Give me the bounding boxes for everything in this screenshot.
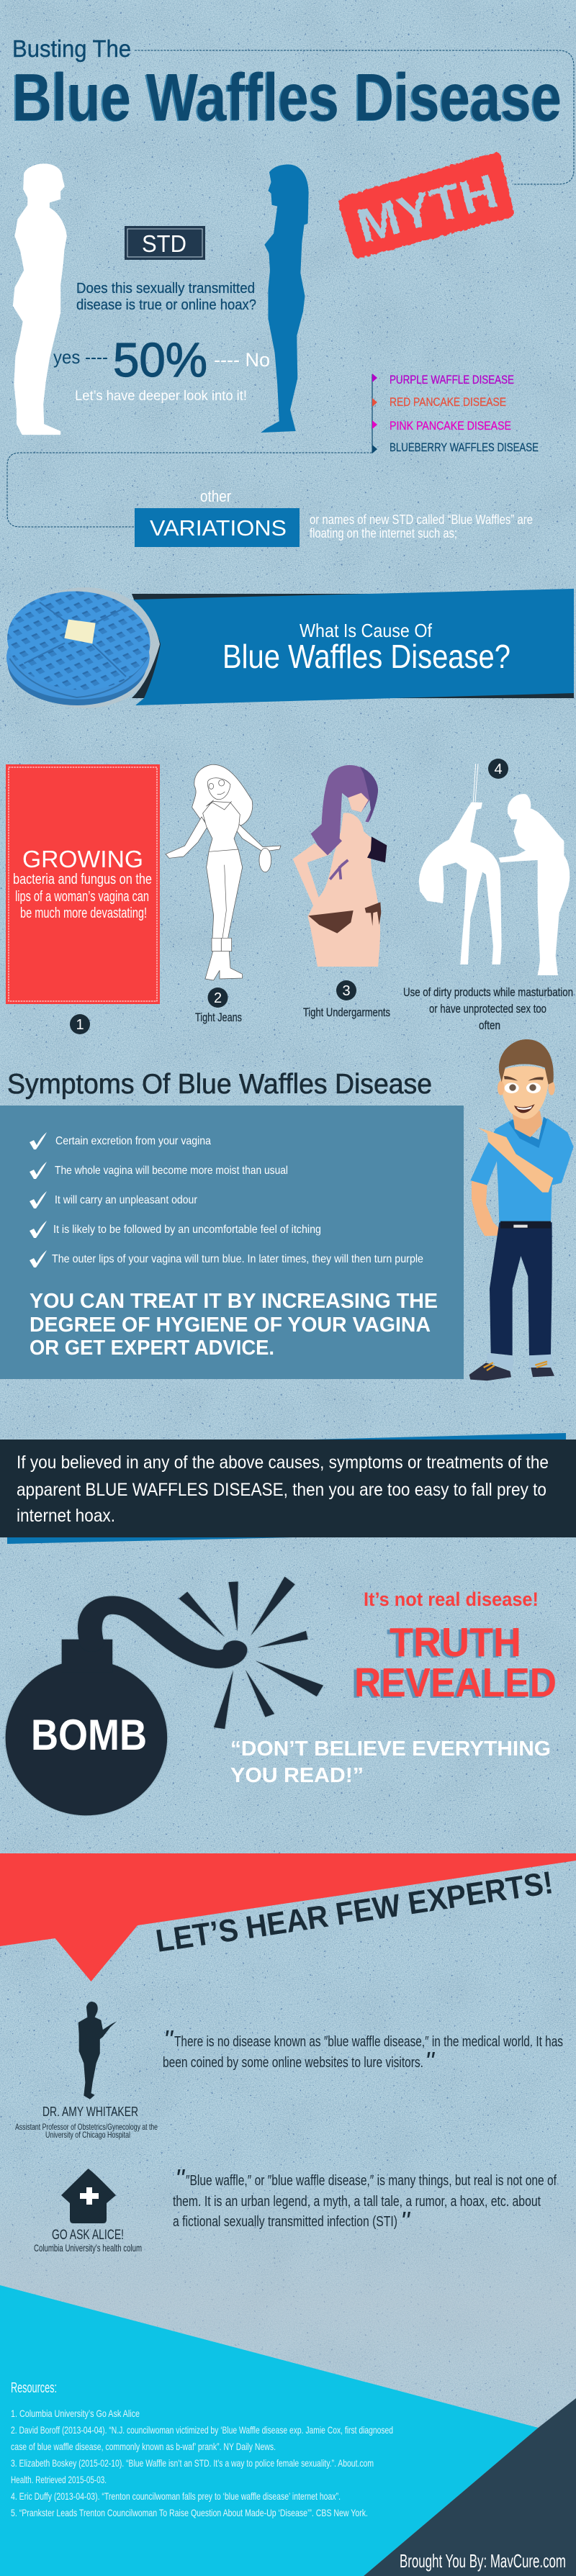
- callout: other variations: other: [200, 487, 231, 505]
- icon: bomb: BOMB: [31, 1711, 147, 1759]
- header title: Busting The: [12, 35, 131, 62]
- number 2: [207, 988, 228, 1008]
- number 1: 1: [76, 1017, 84, 1033]
- stamp: MYTH: [339, 153, 513, 258]
- quote: don't believe: [230, 1737, 551, 1787]
- panel: resources: case of blue waffle disease, commonly known as b-waf’ prank”. NY Daily News.: [11, 2441, 276, 2452]
- heading: experts: LET’S HEAR FEW EXPERTS!: [153, 1865, 555, 1959]
- item 1: Certain excretion from your vagina: [55, 1135, 211, 1147]
- item 3: It will carry an unpleasant odour: [55, 1194, 198, 1206]
- item 2: [30, 1162, 288, 1179]
- panel: resources: Health. Retrieved 2015-05-03.: [11, 2474, 107, 2485]
- caption: dirty products: [403, 985, 573, 1032]
- expert: Dr. Amy Whitaker: [15, 2002, 158, 2140]
- number 3: 3: [342, 983, 351, 999]
- panel: growing: bacteria and fungus on the: [13, 872, 152, 887]
- item 3: [30, 1191, 198, 1208]
- list: variations: RED PANCAKE DISEASE: [390, 395, 506, 409]
- banner: what is cause: What Is Cause Of: [300, 620, 433, 641]
- number 4: 4: [494, 761, 503, 777]
- heading: truth revealed: TRUTH: [390, 1619, 521, 1666]
- panel: resources: 5. “Prankster Leads Trenton Councilwoman To Raise Question About Made-Up ‘Disease’”. CBS New York.: [11, 2507, 368, 2518]
- quote: expert one: ": [425, 2046, 436, 2076]
- panel: resources: 2. David Boroff (2013-04-04). “N.J. councilwoman victimized by ‘Blue Waffle disease exp. Jamie Cox, first diagnosed: [11, 2424, 393, 2436]
- statistic: yes 50% no: [53, 333, 270, 404]
- panel: symptoms list: [0, 1106, 464, 1379]
- item 2: The whole vagina will become more moist than usual: [55, 1165, 288, 1177]
- question text: [76, 281, 256, 313]
- number 2: 2: [214, 990, 222, 1006]
- red speech banner: [0, 1853, 576, 1981]
- bar: hoax conclusion: internet hoax.: [17, 1506, 115, 1526]
- treatment advice: [30, 1290, 438, 1360]
- number 3: [336, 980, 356, 1000]
- number 1: [70, 1014, 90, 1034]
- callout: other variations: [135, 487, 533, 547]
- callout: other variations: or names of new STD called “Blue Waffles” are: [310, 512, 533, 527]
- quote: expert one: [163, 2025, 563, 2076]
- item 4: [30, 1221, 321, 1238]
- item 1: [30, 1132, 211, 1149]
- statistic: yes 50% no: ---- No: [214, 349, 270, 371]
- heading: truth revealed: TRUTH: [387, 1621, 518, 1667]
- panel: resources: [0, 2285, 539, 2576]
- icon: bomb: [6, 1576, 323, 1815]
- item 4: It is likely to be followed by an uncomfortable feel of itching: [53, 1224, 321, 1236]
- item 5: The outer lips of your vagina will turn blue. In later times, they will then turn purple: [52, 1253, 423, 1265]
- heading: truth revealed: [351, 1588, 557, 1707]
- icon: female silhouette: [261, 165, 309, 433]
- list: variations: [372, 373, 539, 454]
- panel: growing: be much more devastating!: [20, 905, 147, 921]
- figure: woman in tight jeans: [166, 764, 281, 980]
- heading: truth revealed: It’s not real disease!: [364, 1588, 539, 1610]
- quote: expert two: a fictional sexually transmitted infection (STI): [173, 2214, 397, 2230]
- footer credit: [364, 2398, 576, 2576]
- quote: expert two: ": [175, 2164, 186, 2193]
- panel: resources: 3. Elizabeth Boskey (2015-02-10). “Blue Waffle isn’t an STD. It’s a way to police female sexuality.”. About.com: [11, 2457, 374, 2469]
- callout: other variations: floating on the internet such as;: [310, 526, 457, 541]
- expert: Dr. Amy Whitaker: University of Chicago Hospital: [45, 2130, 130, 2140]
- statistic: yes 50% no: 50%: [113, 333, 207, 387]
- item 5: [30, 1250, 423, 1267]
- caption: tight jeans: Tight Jeans: [195, 1011, 242, 1024]
- stamp: MYTH: MYTH: [351, 163, 503, 253]
- treatment advice: YOU CAN TREAT IT BY INCREASING THE: [30, 1290, 438, 1313]
- panel: growing: lips of a woman’s vagina can: [15, 889, 149, 905]
- list: variations: PINK PANCAKE DISEASE: [390, 419, 511, 433]
- expert: Go Ask Alice: Columbia University’s health colum: [34, 2242, 142, 2254]
- quote: expert one: been coined by some online websites to lure visitors.: [163, 2055, 423, 2071]
- panel: growing: [6, 764, 160, 1004]
- figure: cartoon man pointing: [469, 1039, 574, 1380]
- expert: Dr. Amy Whitaker: Assistant Professor of Obstetrics/Gynecology at the: [15, 2122, 158, 2132]
- question text: disease is true or online hoax?: [76, 297, 256, 313]
- treatment advice: DEGREE OF HYGIENE OF YOUR VAGINA: [30, 1314, 431, 1337]
- quote: don't believe: “DON’T BELIEVE EVERYTHING: [230, 1737, 551, 1761]
- icon: male silhouette: [13, 163, 67, 435]
- expert: Go Ask Alice: [34, 2169, 142, 2254]
- statistic: yes 50% no: Let’s have deeper look into it!: [75, 389, 247, 404]
- caption: tight undergarments: Tight Undergarments: [303, 1005, 390, 1019]
- panel: resources: 4. Eric Duffy (2013-04-03). “Trenton councilwoman falls prey to ‘blue waffle disease’ internet hoax”.: [11, 2490, 341, 2502]
- quote: expert two: [173, 2164, 557, 2236]
- badge: STD: STD: [142, 230, 186, 257]
- treatment advice: OR GET EXPERT ADVICE.: [30, 1337, 274, 1360]
- heading: truth revealed: REVEALED: [354, 1660, 557, 1706]
- list: variations: PURPLE WAFFLE DISEASE: [390, 373, 514, 387]
- callout: other variations: VARIATIONS: [150, 515, 287, 541]
- quote: expert two: ": [400, 2206, 411, 2236]
- heading: truth revealed: REVEALED: [351, 1661, 554, 1707]
- panel: resources: Resources:: [11, 2380, 57, 2396]
- list: variations: BLUEBERRY WAFFLES DISEASE: [390, 440, 539, 454]
- panel: resources: 1. Columbia University’s Go Ask Alice: [11, 2408, 140, 2419]
- expert: Dr. Amy Whitaker: DR. AMY WHITAKER: [42, 2105, 138, 2119]
- number 4: [488, 759, 508, 779]
- quote: don't believe: YOU READ!”: [230, 1764, 364, 1787]
- figure: woman in undergarments: [293, 765, 387, 967]
- caption: dirty products: often: [479, 1018, 500, 1032]
- figure: white silhouettes: [419, 764, 570, 975]
- statistic: yes 50% no: yes ----: [53, 346, 108, 368]
- expert: Go Ask Alice: GO ASK ALICE!: [52, 2228, 124, 2243]
- quote: expert one: ": [163, 2025, 174, 2054]
- banner: what is cause: Blue Waffles Disease?: [222, 638, 510, 675]
- heading: symptoms: Symptoms Of Blue Waffles Disease: [7, 1069, 432, 1100]
- question text: Does this sexually transmitted: [76, 281, 255, 297]
- bar: hoax conclusion: [0, 1433, 576, 1544]
- badge: STD: [125, 226, 205, 260]
- banner: what is cause: [10, 587, 574, 708]
- icon: stack of blue waffles with butter: [4, 587, 153, 705]
- panel: growing: GROWING: [22, 846, 143, 872]
